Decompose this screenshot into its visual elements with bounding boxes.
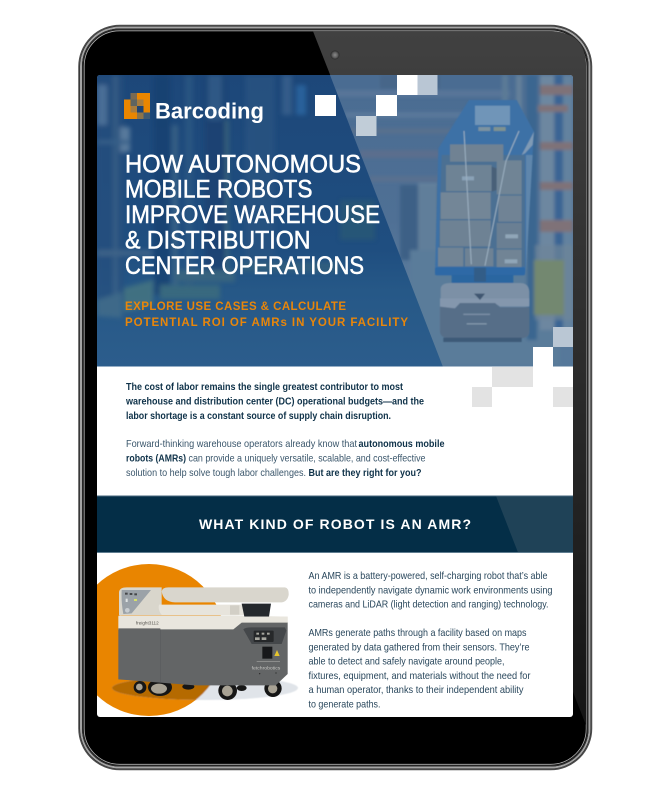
body text: what an AMR is: An AMR is a battery-powered, self-charging robot that’s able xyxy=(308,571,548,582)
title xyxy=(125,150,380,280)
logo mark xyxy=(124,93,150,119)
title: & DISTRIBUTION xyxy=(125,226,310,254)
title: MOBILE ROBOTS xyxy=(125,176,312,204)
fetch robot xyxy=(435,100,534,342)
body text: how AMRs generate paths: fixtures, equipment, and materials without the need for xyxy=(308,671,531,682)
robot body xyxy=(118,587,289,700)
intro paragraph: warehouse and distribution center (DC) operational budgets—and the xyxy=(125,396,424,408)
subtitle: EXPLORE USE CASES & CALCULATE xyxy=(125,301,346,313)
AMR intro paragraph: Forward-thinking warehouse operators already know that xyxy=(126,439,357,450)
screen background xyxy=(97,75,573,717)
hero panel: warehouse photo xyxy=(97,75,573,367)
body text: how AMRs generate paths: generated by data gathered from their sensors. They’re xyxy=(308,642,530,654)
title: HOW AUTONOMOUS xyxy=(125,150,361,178)
robot body: fetchrobotics xyxy=(252,666,281,672)
robot body: freight3112 xyxy=(136,621,159,627)
blue left overlay with shelves xyxy=(97,75,443,367)
band heading: WHAT KIND OF ROBOT IS AN AMR? xyxy=(199,516,471,532)
tablet frame xyxy=(79,26,592,770)
AMR intro paragraph: can provide a uniquely versatile, scalable, and cost-effective xyxy=(188,454,426,464)
AMR intro paragraph: But are they right for you? xyxy=(308,468,422,479)
decorative squares bottom xyxy=(472,327,573,407)
body text: how AMRs generate paths xyxy=(308,628,531,710)
bezel reflection xyxy=(313,31,586,725)
robot illustration xyxy=(97,564,298,716)
intro paragraph: labor shortage is a constant source of supply chain disruption. xyxy=(126,411,391,422)
AMR intro paragraph: solution to help solve tough labor challenges. xyxy=(126,468,306,479)
right photo background shelves xyxy=(336,75,573,340)
body text: how AMRs generate paths: AMRs generate paths through a facility based on maps xyxy=(308,628,526,639)
camera xyxy=(330,50,340,60)
body text: what an AMR is: cameras and LiDAR (light detection and ranging) technology. xyxy=(308,600,548,610)
section band xyxy=(97,496,573,553)
body text: what an AMR is: to independently navigate dynamic work environments using xyxy=(308,586,553,596)
body text: how AMRs generate paths: able to detect and safely navigate around people, xyxy=(308,656,504,668)
logo wordmark: Barcoding xyxy=(155,98,264,124)
body text: how AMRs generate paths: a human operator, thanks to their independent ability xyxy=(308,685,524,696)
logo xyxy=(124,93,264,124)
robot shadow xyxy=(112,680,298,701)
body text: what an AMR is xyxy=(308,571,553,610)
body text: how AMRs generate paths: to generate paths. xyxy=(308,700,380,710)
AMR intro paragraph: autonomous mobile xyxy=(358,439,445,450)
orange circle xyxy=(97,564,221,716)
intro paragraph xyxy=(125,382,424,422)
AMR intro paragraph xyxy=(126,439,445,479)
intro paragraph: The cost of labor remains the single greatest contributor to most xyxy=(126,382,404,393)
subtitle xyxy=(125,301,408,329)
subtitle: POTENTIAL ROI OF AMRs IN YOUR FACILITY xyxy=(125,317,408,329)
title: CENTER OPERATIONS xyxy=(125,252,364,280)
AMR intro paragraph: robots (AMRs) xyxy=(126,454,186,464)
decorative squares top xyxy=(315,75,438,136)
title: IMPROVE WAREHOUSE xyxy=(125,201,380,229)
